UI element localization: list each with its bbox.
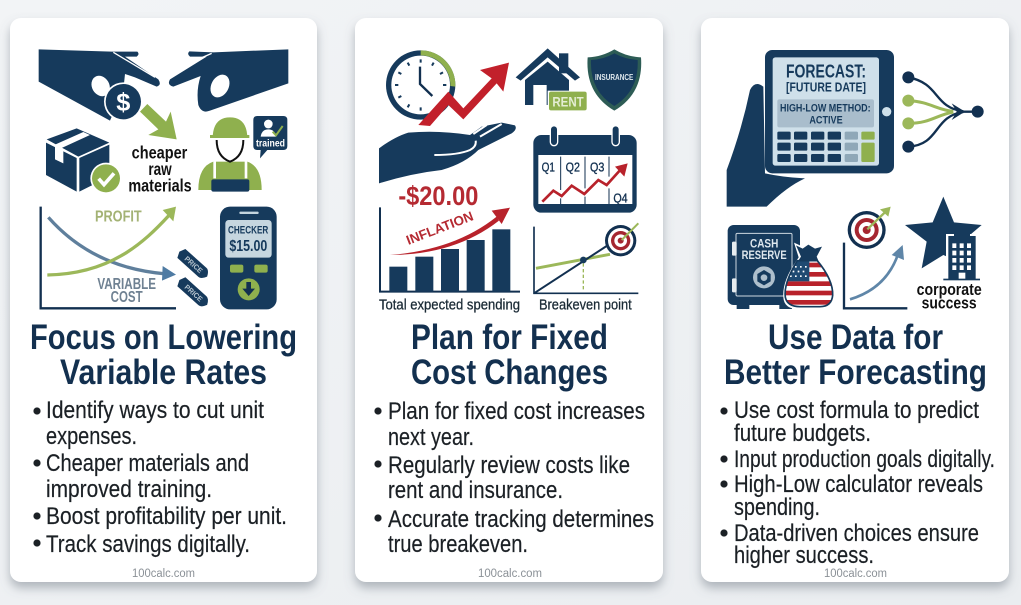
icon: price checker device: CHECKER: [228, 225, 268, 237]
heading: Cost Changes: [411, 353, 608, 392]
illustration group: variable rates: [39, 49, 288, 309]
text: cheaper raw materials: [128, 142, 192, 196]
icon: quarterly calendar: Q3: [590, 161, 604, 175]
panel: plan for fixed cost changes: [355, 18, 663, 582]
icon: house with rent tag: [516, 48, 588, 111]
text: minus twenty dollars: -$20.00: [398, 181, 478, 211]
chart: total expected spending bars: INFLATION: [404, 208, 475, 248]
icon: box with check: [46, 128, 122, 194]
icon: receiving hand: [169, 49, 288, 112]
watermark: 100calc.com: [478, 568, 542, 580]
icon: clock: [386, 50, 455, 120]
icon: quarterly calendar: Q2: [566, 161, 580, 175]
chart: profit versus variable cost: COST: [111, 289, 143, 306]
heading: Plan for Fixed: [411, 318, 608, 357]
bullet list: [720, 397, 995, 569]
icon: price checker device: [220, 207, 277, 309]
chart: total expected spending bars: Total expected spending: [379, 297, 520, 313]
chart: total expected spending bars: [379, 207, 520, 313]
icon: forecast tablet: [FUTURE DATE]: [786, 79, 866, 94]
text: corporate success: [917, 280, 982, 312]
heading: [724, 318, 987, 392]
icon: green arrow: [140, 104, 177, 139]
icon: quarterly calendar: Q1: [542, 161, 555, 175]
icon: dollar coin: [104, 82, 143, 121]
bullet list: expenses.: [46, 423, 137, 450]
bullet list: Identify ways to cut unit: [46, 397, 264, 424]
text: cheaper raw materials: raw: [148, 159, 172, 179]
icon: forecast tablet: ACTIVE: [809, 114, 843, 126]
bullet list: spending.: [734, 494, 820, 521]
bullet list: Track savings digitally.: [46, 531, 250, 558]
icon: forecast tablet: FORECAST:: [786, 60, 866, 81]
bullet list: [34, 397, 287, 558]
bullet list: improved training.: [46, 476, 212, 503]
bullet list: next year.: [388, 424, 474, 451]
icon: trained speech bubble: trained: [256, 139, 285, 150]
icon: trained speech bubble: [253, 116, 287, 158]
icon: trained worker: [198, 117, 262, 192]
icon: star and building: [905, 197, 982, 281]
icon: hand dropping coin: [39, 49, 160, 121]
bullet list: true breakeven.: [388, 531, 528, 558]
icon: forecast tablet: [765, 50, 894, 173]
bullet list: Data-driven choices ensure: [734, 520, 979, 547]
chart: profit versus variable cost: VARIABLE: [97, 276, 156, 293]
bullet list: Cheaper materials and: [46, 450, 249, 477]
chart: breakeven point: [534, 223, 638, 313]
text: corporate success: success: [922, 293, 977, 312]
icon: insurance shield: [587, 49, 641, 111]
icon: open hand: [379, 123, 516, 183]
heading: Variable Rates: [60, 353, 267, 392]
bullet list: Accurate tracking determines: [388, 506, 654, 533]
watermark: 100calc.com: [132, 568, 195, 580]
bullet list: Use cost formula to predict: [734, 397, 979, 424]
icon: house with rent tag: RENT: [552, 94, 584, 110]
heading: [30, 318, 297, 392]
bullet list: High-Low calculator reveals: [734, 471, 983, 498]
icon: cash reserve safe: CASH: [750, 236, 778, 250]
illustration group: forecasting: [727, 50, 984, 312]
icon: price tags: PRICE: [183, 254, 205, 275]
text: cheaper raw materials: materials: [128, 176, 192, 196]
bullet list: Boost profitability per unit.: [46, 503, 287, 530]
icon: price tags: [175, 247, 211, 309]
chart: profit versus variable cost: PROFIT: [95, 209, 142, 226]
icon: hand holding tablet: [727, 84, 805, 207]
heading: [411, 318, 608, 392]
watermark: 100calc.com: [824, 568, 887, 580]
panel: use data for better forecasting: [701, 18, 1009, 582]
icon: dollar coin: $: [116, 89, 130, 117]
icon: forecast tablet: HIGH-LOW METHOD:: [780, 103, 871, 115]
chart: breakeven point: Breakeven point: [539, 297, 632, 313]
text: corporate success: corporate: [917, 280, 982, 299]
heading: Focus on Lowering: [30, 318, 297, 357]
text: cheaper raw materials: cheaper: [132, 142, 188, 162]
icon: insurance shield: INSURANCE: [595, 73, 634, 82]
bullet list: Plan for fixed cost increases: [388, 398, 645, 425]
icon: quarterly calendar: Q4: [613, 192, 628, 206]
icon: flag money bag: [783, 242, 835, 309]
icon: rising red arrow: [418, 63, 509, 126]
panel: focus on lowering variable rates: [10, 18, 317, 582]
icon: price checker device: $15.00: [229, 238, 267, 255]
icon: cash reserve safe: RESERVE: [742, 248, 787, 262]
chart: rising trend: [844, 243, 907, 308]
chart: profit versus variable cost: [41, 207, 176, 308]
bullet list: higher success.: [734, 542, 874, 569]
illustration group: fixed costs: [379, 48, 641, 313]
icon: cash reserve safe: [728, 225, 800, 309]
bullet list: future budgets.: [734, 420, 871, 447]
icon: target with arrow: [848, 207, 891, 249]
icon: quarterly calendar: [533, 126, 637, 213]
bullet list: rent and insurance.: [388, 477, 563, 504]
bullet list: [374, 398, 654, 558]
icon: price tags: PRICE: [183, 283, 205, 304]
heading: Use Data for: [768, 318, 943, 357]
bullet list: Regularly review costs like: [388, 452, 630, 479]
icon: data converging network: [902, 71, 984, 153]
